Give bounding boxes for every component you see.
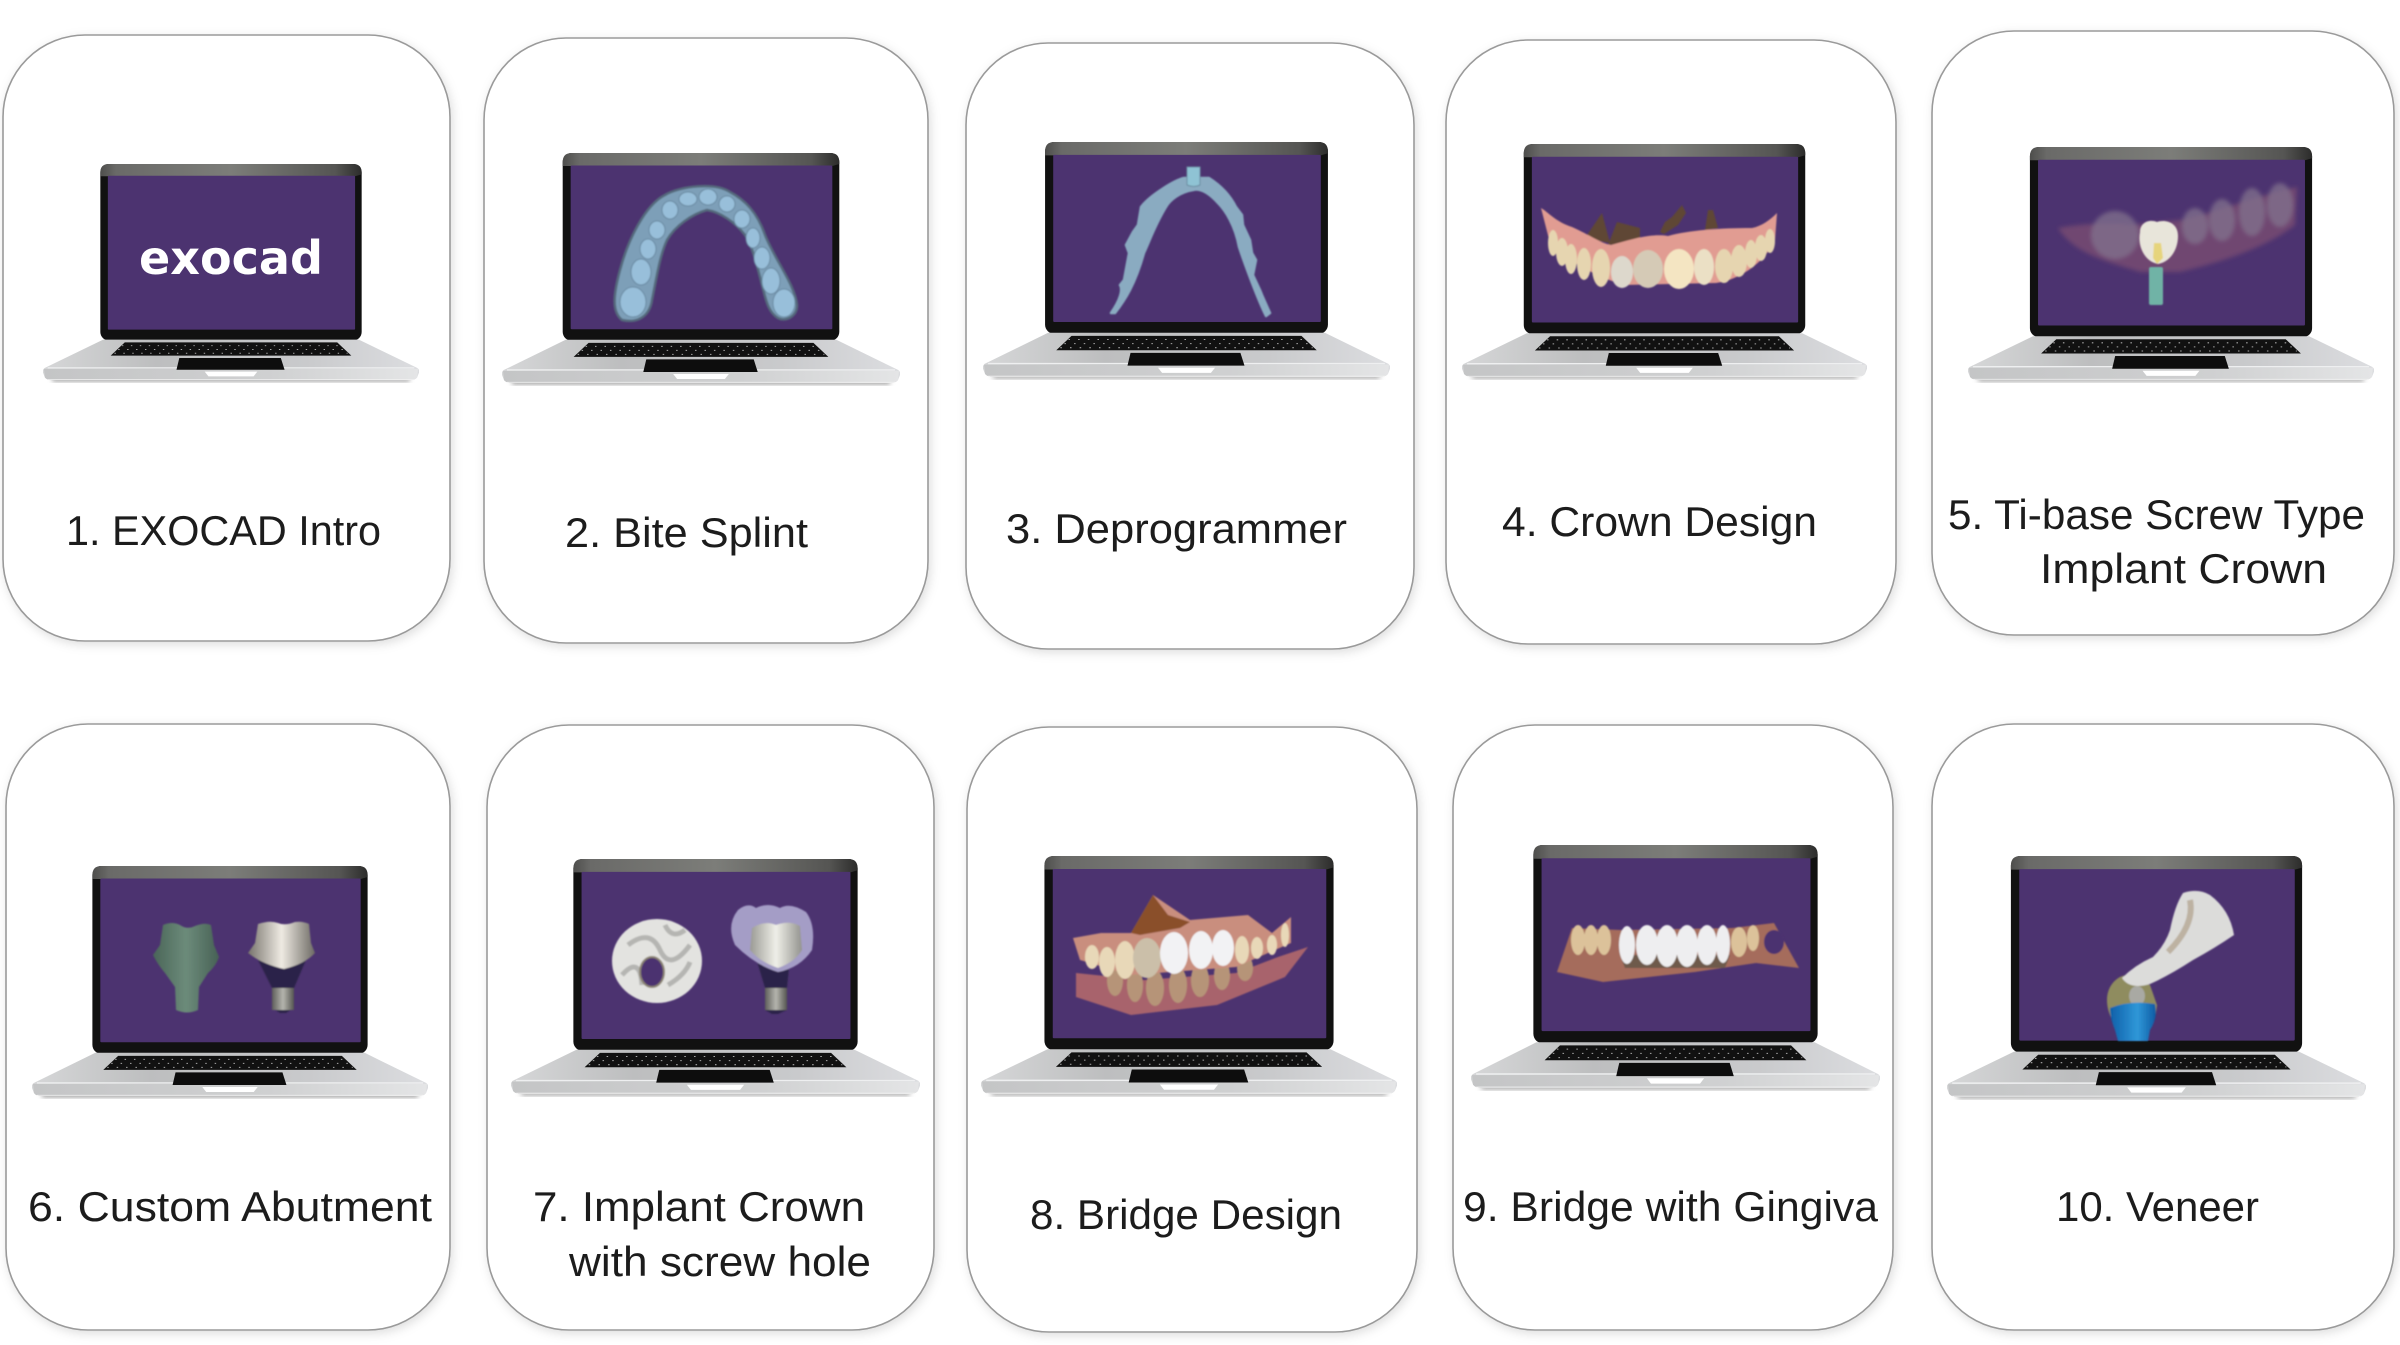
label: 4. Crown Design bbox=[1502, 498, 1817, 545]
card outline bbox=[966, 43, 1414, 649]
label: 1. EXOCAD Intro bbox=[66, 507, 381, 554]
card outline bbox=[1453, 725, 1893, 1330]
label: 9. Bridge with Gingiva bbox=[1463, 1183, 1879, 1230]
panel: 8. Bridge Design bbox=[967, 727, 1417, 1332]
icon: deprogrammer bbox=[1111, 167, 1270, 316]
icon: crown occlusal view with screw hole and implant crown bbox=[612, 905, 813, 1014]
panel: 6. Custom Abutment bbox=[6, 724, 450, 1330]
panel: 3. Deprogrammer bbox=[966, 43, 1414, 649]
icon: bridge design model bbox=[1073, 895, 1308, 1015]
laptop bbox=[32, 866, 428, 1097]
laptop bbox=[1947, 856, 2366, 1098]
laptop bbox=[1462, 144, 1867, 378]
card outline bbox=[6, 724, 450, 1330]
card outline bbox=[487, 725, 934, 1330]
panel: 7. Implant Crown with screw hole bbox=[487, 725, 934, 1330]
card outline bbox=[1932, 724, 2394, 1330]
laptop bbox=[983, 142, 1390, 378]
label: 7. Implant Crown bbox=[533, 1183, 865, 1230]
label: 5. Ti-base Screw Type bbox=[1948, 491, 2365, 538]
icon: bite splint arch bbox=[615, 186, 797, 321]
icon: implant crown with translucent arch bbox=[2058, 183, 2297, 305]
laptop bbox=[1968, 147, 2374, 381]
laptop with exocad logo bbox=[43, 164, 419, 381]
icon: crown design model bbox=[1541, 205, 1777, 289]
panel: 4. Crown Design bbox=[1446, 40, 1896, 644]
label: 8. Bridge Design bbox=[1030, 1191, 1342, 1238]
panel: 10. Veneer bbox=[1932, 724, 2394, 1330]
card outline bbox=[1932, 31, 2394, 635]
card outline bbox=[484, 38, 928, 643]
label: 2. Bite Splint bbox=[565, 509, 808, 556]
laptop with exocad logo: exocad bbox=[139, 231, 323, 285]
laptop bbox=[1471, 845, 1880, 1089]
laptop bbox=[981, 856, 1397, 1095]
label line 2: Implant Crown bbox=[2040, 545, 2327, 592]
label line 2: with screw hole bbox=[568, 1238, 871, 1285]
label: 6. Custom Abutment bbox=[28, 1183, 432, 1230]
laptop bbox=[511, 859, 920, 1095]
icon: abutments bbox=[153, 922, 315, 1013]
panel: 1. EXOCAD Intro bbox=[3, 35, 450, 641]
label: 3. Deprogrammer bbox=[1006, 505, 1347, 552]
card outline bbox=[967, 727, 1417, 1332]
icon: bridge with gingiva model bbox=[1557, 923, 1799, 982]
panel: 5. Ti-base Screw Type Implant Crown bbox=[1932, 31, 2394, 635]
icon: veneer on blue abutment bbox=[2107, 891, 2234, 1041]
label: 10. Veneer bbox=[2056, 1183, 2259, 1230]
card outline bbox=[3, 35, 450, 641]
card outline bbox=[1446, 40, 1896, 644]
panel: 9. Bridge with Gingiva bbox=[1453, 725, 1893, 1330]
laptop bbox=[502, 153, 900, 384]
panel: 2. Bite Splint bbox=[484, 38, 928, 643]
